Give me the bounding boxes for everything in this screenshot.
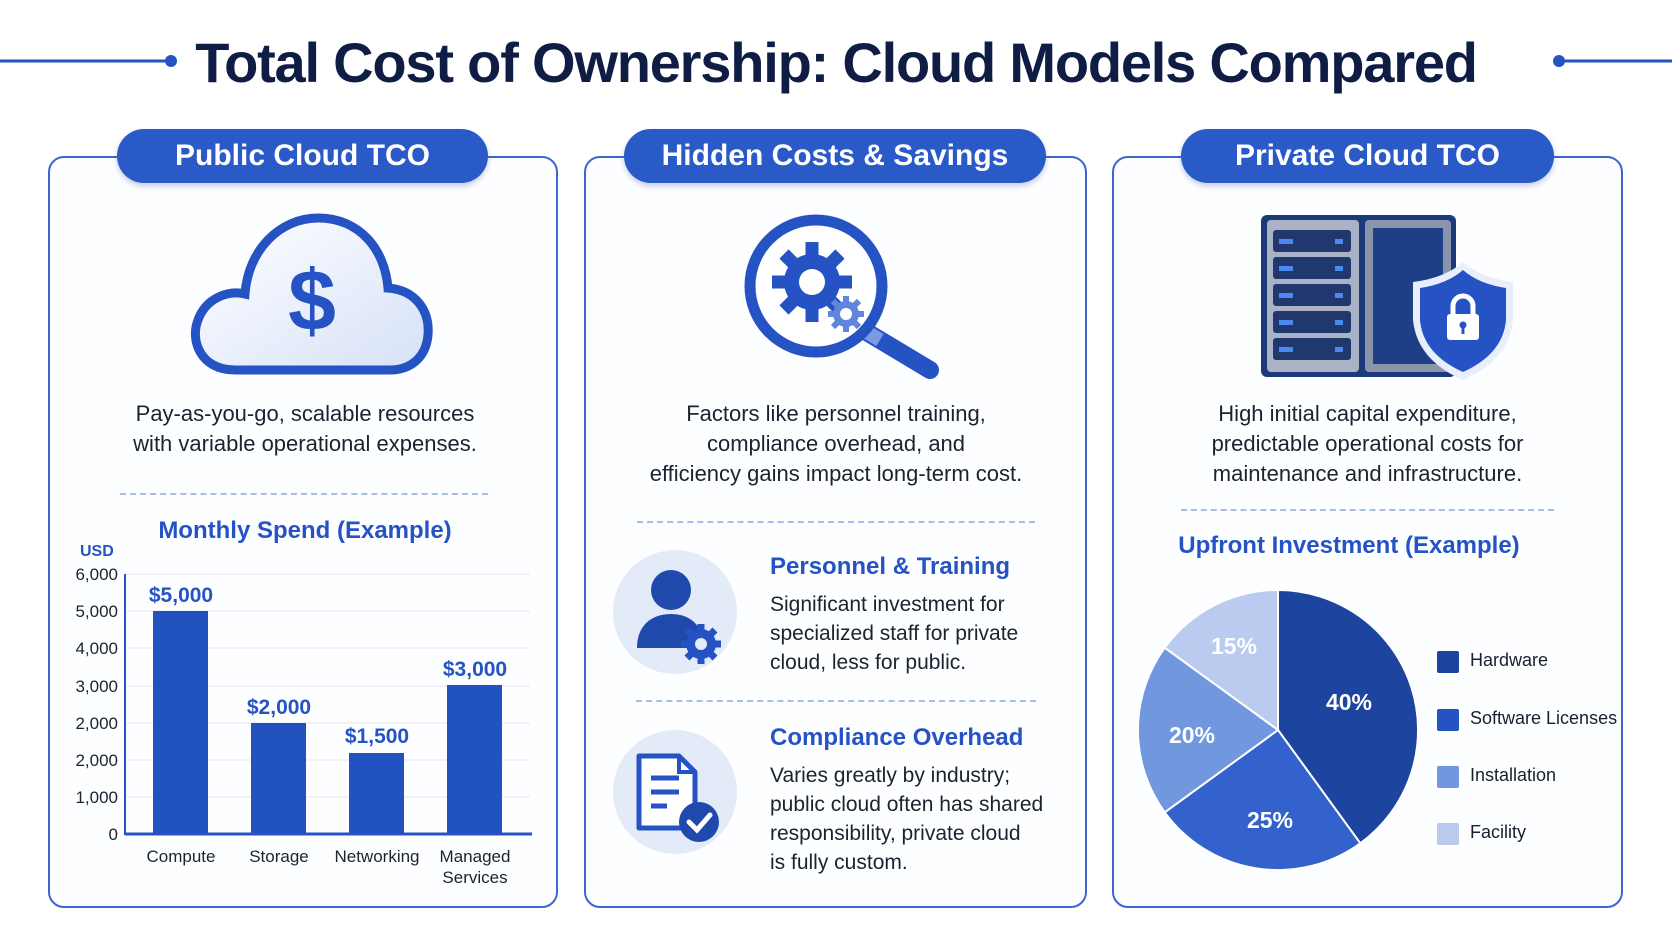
bar chart: Networking [334,847,420,866]
text: private description: predictable operational costs for [1212,431,1523,456]
text: hidden description [650,401,1022,486]
text: private description [1212,401,1524,486]
icon: cloud dollar [190,214,433,374]
bar chart: 2,000 [75,714,118,733]
heading: public cloud: Public Cloud TCO [175,139,430,172]
icon: magnifier gear [744,214,939,379]
block: compliance overhead: Compliance Overhead [770,724,1023,751]
bar chart: 6,000 [75,565,118,584]
panel: hidden costs [584,156,1087,908]
icon: personnel [613,550,737,674]
bar chart: 2,000 [75,751,118,770]
bar chart: USD [80,543,114,560]
bar chart: 5,000 [75,602,118,621]
text: hidden description: Factors like personnel training, [686,401,986,426]
heading: hidden costs [624,129,1046,183]
icon: cloud dollar: $ [288,253,336,349]
legend: Software Licenses [1470,708,1617,728]
text: hidden description: compliance overhead, and [707,431,965,456]
block: compliance overhead: is fully custom. [770,851,908,874]
text: public description: with variable operational expenses. [133,431,477,456]
icon: server with shield [1261,215,1513,380]
text: hidden description: efficiency gains impact long-term cost. [650,461,1022,486]
bar chart: $2,000 [247,696,311,719]
bar chart: $1,500 [345,725,409,748]
text: public description: Pay-as-you-go, scalable resources [136,401,474,426]
heading: upfront investment: Upfront Investment (Example) [1178,532,1520,559]
pie chart: 25% [1247,807,1293,833]
legend: Installation [1470,765,1556,785]
pie chart: 20% [1169,722,1215,748]
panel: public cloud [48,156,558,908]
bar chart: $5,000 [149,584,213,607]
text: public description [133,401,477,456]
heading: hidden costs: Hidden Costs & Savings [662,139,1008,172]
heading: private cloud [1181,129,1554,183]
panel: private cloud [1112,156,1623,908]
block: compliance overhead: Varies greatly by industry; [770,764,1010,787]
text: private description: maintenance and infrastructure. [1213,461,1522,486]
block: personnel & training [770,553,1018,674]
bar chart: $3,000 [443,658,507,681]
block: personnel & training: cloud, less for public. [770,651,966,674]
block: compliance overhead: responsibility, private cloud [770,822,1021,845]
pie chart: 15% [1211,633,1257,659]
legend: Facility [1470,822,1526,842]
bar chart: Storage [249,847,309,866]
bar chart: 4,000 [75,639,118,658]
icon: compliance document [613,730,737,854]
bar chart: 3,000 [75,677,118,696]
block: compliance overhead: public cloud often has shared [770,793,1043,816]
text: private description: High initial capital expenditure, [1218,401,1517,426]
bar chart: 1,000 [75,788,118,807]
heading: public cloud [117,129,488,183]
bar chart: 0 [109,825,118,844]
bar chart: Compute [147,847,215,866]
block: personnel & training: Significant investment for [770,593,1005,616]
block: personnel & training: Personnel & Training [770,553,1010,580]
heading: monthly spend: Monthly Spend (Example) [158,517,452,544]
title: Total Cost of Ownership: Cloud Models Compared [195,31,1477,94]
legend: Hardware [1470,650,1548,670]
legend [1437,650,1617,845]
block: compliance overhead [770,724,1043,874]
pie chart [1138,591,1418,870]
heading: private cloud: Private Cloud TCO [1235,139,1500,172]
bar chart: Managed [440,847,510,866]
block: personnel & training: specialized staff for private [770,622,1018,645]
bar chart [75,543,532,885]
pie chart: 40% [1326,689,1372,715]
